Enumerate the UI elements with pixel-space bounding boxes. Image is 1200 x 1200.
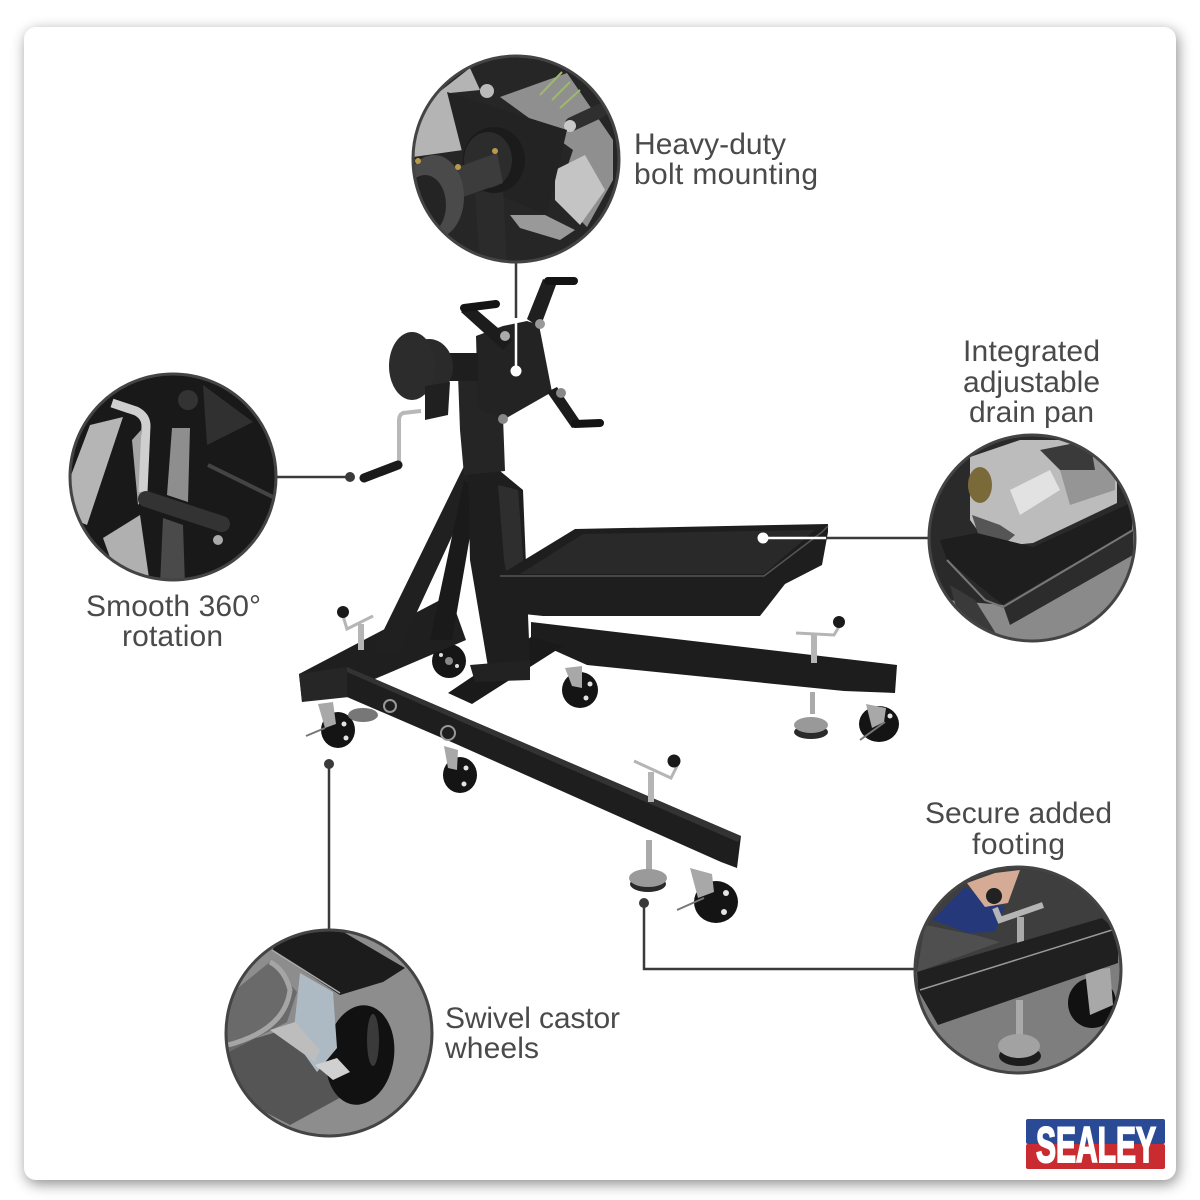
base frame front arm [347,667,741,868]
leader: drain pan [758,532,928,544]
label: heavy-duty bolt mounting: bolt mounting [634,158,818,191]
levelling feet [337,606,845,892]
circle photo: castor wheel [223,927,435,1139]
crank handle [364,411,421,478]
castor wheels [306,666,899,923]
leader: castor wheels [324,759,334,930]
label: secure added footing: Secure added [925,797,1112,830]
label: swivel castor wheels [444,1002,620,1065]
engine stand product [299,279,899,923]
base frame back beam [299,599,466,702]
back wheel and rear foot [408,571,466,678]
label: heavy-duty bolt mounting: Heavy-duty [634,128,786,161]
label: integrated adjustable drain pan: drain pan [969,396,1094,429]
label: integrated adjustable drain pan: adjustable [963,366,1100,399]
leader: bolt mounting [510,262,522,376]
label: smooth 360 rotation [86,590,261,653]
circle photo: drain pan [926,432,1138,644]
label: integrated adjustable drain pan: Integrated [963,335,1100,368]
leader: footing [639,898,916,969]
label: swivel castor wheels: wheels [444,1032,539,1065]
base frame cross beam [448,637,563,704]
winch drum [389,332,478,420]
base frame corner block [299,667,349,702]
mounting arms [461,279,600,428]
label: integrated adjustable drain pan [963,335,1100,429]
circle photo: bolt mounting [404,53,622,265]
mounting plate [476,321,552,420]
drain pan [498,524,828,616]
leader: rotation [276,472,355,482]
circle photo: footing [912,864,1124,1076]
label: smooth 360 rotation: rotation [122,620,223,653]
upright column [458,375,530,682]
label: secure added footing: footing [972,828,1065,861]
label: smooth 360 rotation: Smooth 360° [86,590,261,623]
label: secure added footing [925,797,1112,861]
circle photo: crank handle [67,371,279,585]
diagonal braces [373,417,503,655]
label: heavy-duty bolt mounting [634,128,818,191]
base frame right arm [531,622,897,693]
label: swivel castor wheels: Swivel castor [445,1002,620,1035]
